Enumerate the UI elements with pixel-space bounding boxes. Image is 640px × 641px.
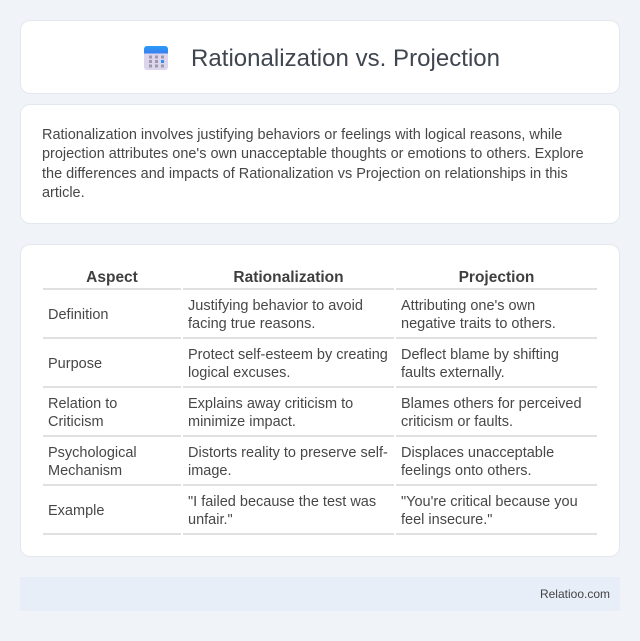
Psychological Mechanism: Rationalization: Distorts reality to preserve self-: [188, 445, 388, 461]
Example: Projection: feel insecure.": [401, 512, 492, 528]
title: Rationalization vs. Projection: [191, 45, 500, 72]
intro text: the differences and impacts of Rationalization vs Projection on relationships in this: [42, 166, 568, 182]
panel: introduction: [20, 104, 620, 224]
row: Definition: Definition: [48, 307, 108, 323]
footer bar: [20, 577, 620, 611]
panel: title card: [20, 20, 620, 94]
Example: Projection: "You're critical because you: [401, 494, 578, 510]
Psychological Mechanism: Rationalization: [188, 445, 388, 479]
row: Psychological Mechanism: [48, 445, 137, 479]
intro text: [42, 127, 584, 201]
Definition: Rationalization: facing true reasons.: [188, 316, 315, 332]
Purpose: Rationalization: logical excuses.: [188, 365, 290, 381]
Definition: Projection: [401, 298, 556, 332]
Purpose: Projection: [401, 347, 559, 381]
Relation to Criticism: Rationalization: Explains away criticism to: [188, 396, 353, 412]
Relation to Criticism: Rationalization: [188, 396, 353, 430]
row: Relation to Criticism: Relation to: [48, 396, 117, 412]
Psychological Mechanism: Projection: [401, 445, 554, 479]
row: Psychological Mechanism: Psychological: [48, 445, 137, 461]
intro text: Rationalization involves justifying behaviors or feelings with logical reasons, while: [42, 127, 562, 143]
Purpose: Rationalization: Protect self-esteem by creating: [188, 347, 388, 363]
Example: Rationalization: [188, 494, 376, 528]
table header: Aspect: Aspect: [86, 269, 138, 286]
table header: Projection: Projection: [459, 269, 534, 286]
footer text: Relatioo.com: [540, 587, 610, 601]
table header: Rationalization: Rationalization: [233, 269, 344, 286]
row: Example: Example: [48, 503, 104, 519]
row: Psychological Mechanism: Mechanism: [48, 463, 122, 479]
Definition: Projection: Attributing one's own: [401, 298, 535, 314]
intro text: projection attributes one's own unacceptable thoughts or emotions to others. Explore: [42, 146, 584, 162]
Example: Rationalization: "I failed because the test was: [188, 494, 376, 510]
Purpose: Rationalization: [188, 347, 388, 381]
Relation to Criticism: Rationalization: minimize impact.: [188, 414, 296, 430]
Example: Rationalization: unfair.": [188, 512, 233, 528]
Definition: Rationalization: Justifying behavior to avoid: [188, 298, 363, 314]
icon: calendar: [144, 46, 168, 70]
row: Purpose: Purpose: [48, 356, 102, 372]
Purpose: Projection: faults externally.: [401, 365, 505, 381]
Definition: Projection: negative traits to others.: [401, 316, 556, 332]
panel: comparison table: [20, 244, 620, 557]
Relation to Criticism: Projection: Blames others for perceived: [401, 396, 582, 412]
Psychological Mechanism: Rationalization: image.: [188, 463, 232, 479]
row: Relation to Criticism: [48, 396, 117, 430]
Relation to Criticism: Projection: [401, 396, 582, 430]
Relation to Criticism: Projection: criticism or faults.: [401, 414, 513, 430]
intro text: article.: [42, 185, 85, 201]
Purpose: Projection: Deflect blame by shifting: [401, 347, 559, 363]
Psychological Mechanism: Projection: feelings onto others.: [401, 463, 532, 479]
Definition: Rationalization: [188, 298, 363, 332]
row: Relation to Criticism: Criticism: [48, 414, 104, 430]
Psychological Mechanism: Projection: Displaces unacceptable: [401, 445, 554, 461]
Example: Projection: [401, 494, 578, 528]
